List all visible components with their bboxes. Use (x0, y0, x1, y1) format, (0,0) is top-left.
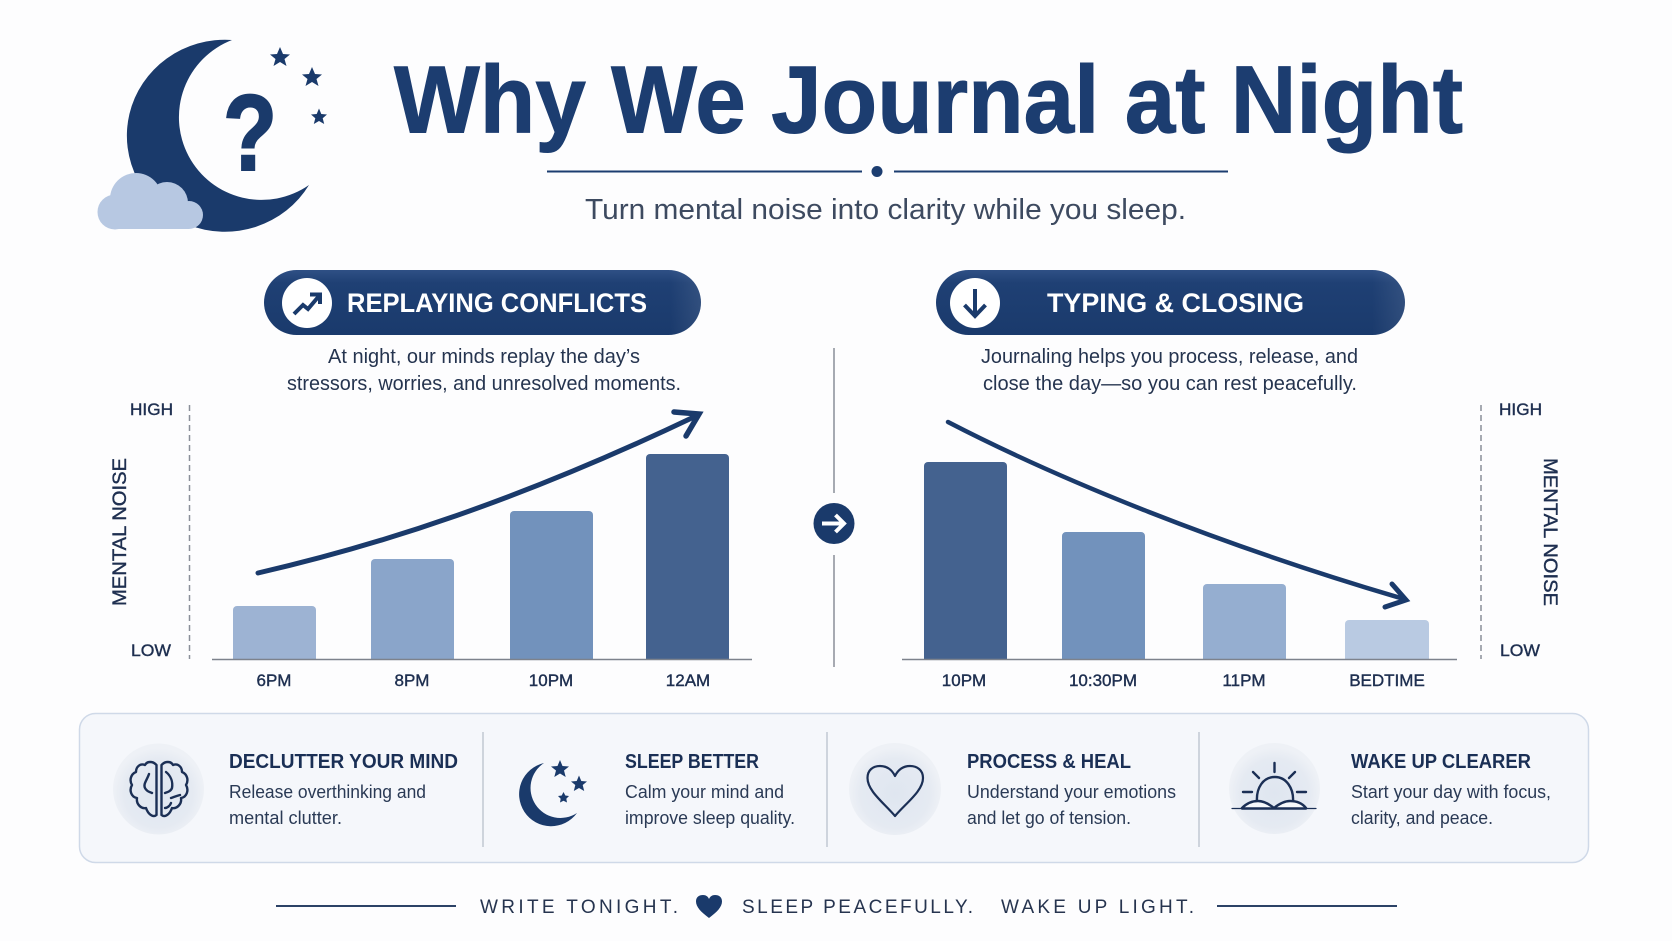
icon: rising arrow (282, 278, 332, 328)
icon: moon with question mark, stars and cloud (98, 40, 327, 232)
right bars (902, 462, 1457, 660)
footer tagline (276, 895, 1397, 918)
icon: moon with stars (519, 760, 587, 826)
panel: typing and closing header pill (936, 270, 1405, 335)
left description: At night, our minds replay the day’s (328, 345, 640, 368)
subtitle: Turn mental noise into clarity while you sleep. (585, 194, 1186, 226)
panel: replaying conflicts header pill (264, 270, 701, 335)
benefit: sleep better: SLEEP BETTER (625, 750, 759, 773)
left time labels (257, 671, 710, 690)
right description (981, 345, 1358, 395)
footer tagline: WAKE UP LIGHT. (1001, 897, 1194, 918)
left time labels: 12AM (666, 671, 710, 690)
benefit: wake up clearer: clarity, and peace. (1351, 808, 1493, 828)
left time labels: 10PM (529, 671, 573, 690)
right time labels: BEDTIME (1349, 671, 1425, 690)
right description: Journaling helps you process, release, and (981, 345, 1358, 368)
icon: right arrow (814, 503, 854, 544)
right axis labels: HIGH (1499, 400, 1542, 419)
right time labels (942, 671, 1425, 690)
benefit: sleep better: Calm your mind and (625, 782, 784, 802)
icon: down arrow (950, 278, 1000, 328)
panel: benefits (80, 714, 1588, 862)
icon: footer heart (696, 895, 722, 918)
left axis labels (110, 400, 190, 660)
left axis labels: LOW (131, 641, 171, 660)
benefit: wake up clearer: WAKE UP CLEARER (1351, 750, 1531, 773)
benefit: wake up clearer (1229, 743, 1551, 834)
arrow: rising trend (258, 412, 699, 573)
right axis labels (1481, 400, 1560, 660)
benefit: declutter your mind (113, 744, 458, 834)
benefit: declutter your mind: DECLUTTER YOUR MIND (229, 750, 458, 773)
left chart: mental noise rising (110, 400, 752, 690)
benefit: declutter your mind: Release overthinking and (229, 782, 426, 802)
benefit: process and heal: Understand your emotions (967, 782, 1176, 802)
panel: replaying conflicts header pill: REPLAYING CONFLICTS (347, 288, 647, 318)
left bars (212, 454, 752, 660)
benefit: sleep better (519, 750, 795, 828)
footer tagline: WRITE TONIGHT. (480, 897, 678, 918)
right description: close the day—so you can rest peacefully. (983, 372, 1357, 395)
right axis labels: MENTAL NOISE (1539, 458, 1560, 606)
icon: moon with question mark, stars and cloud: ? (223, 72, 277, 193)
benefit: sleep better: improve sleep quality. (625, 808, 795, 828)
title divider (547, 166, 1228, 177)
benefit: process and heal: and let go of tension. (967, 808, 1131, 828)
left axis labels: HIGH (130, 400, 173, 419)
left description: stressors, worries, and unresolved moments. (287, 372, 681, 395)
panel: typing and closing header pill: TYPING & CLOSING (1047, 288, 1304, 318)
left description (287, 345, 681, 395)
right time labels: 10:30PM (1069, 671, 1137, 690)
arrow: falling trend (948, 422, 1406, 607)
right axis labels: LOW (1500, 641, 1540, 660)
benefit: process and heal: PROCESS & HEAL (967, 750, 1131, 773)
benefit: wake up clearer: Start your day with focus, (1351, 782, 1551, 802)
right time labels: 11PM (1222, 671, 1266, 690)
right chart: mental noise falling (902, 400, 1560, 690)
left axis labels: MENTAL NOISE (110, 458, 131, 606)
right time labels: 10PM (942, 671, 986, 690)
title: Why We Journal at Night (394, 46, 1463, 154)
icon: heart (849, 743, 941, 835)
center divider with arrow (814, 348, 854, 667)
left time labels: 8PM (395, 671, 429, 690)
benefit: declutter your mind: mental clutter. (229, 808, 342, 828)
icon: sunrise (1229, 743, 1320, 834)
icon: brain (113, 744, 204, 834)
benefit: process and heal (849, 743, 1176, 835)
footer tagline: SLEEP PEACEFULLY. (742, 897, 973, 918)
left time labels: 6PM (257, 671, 291, 690)
